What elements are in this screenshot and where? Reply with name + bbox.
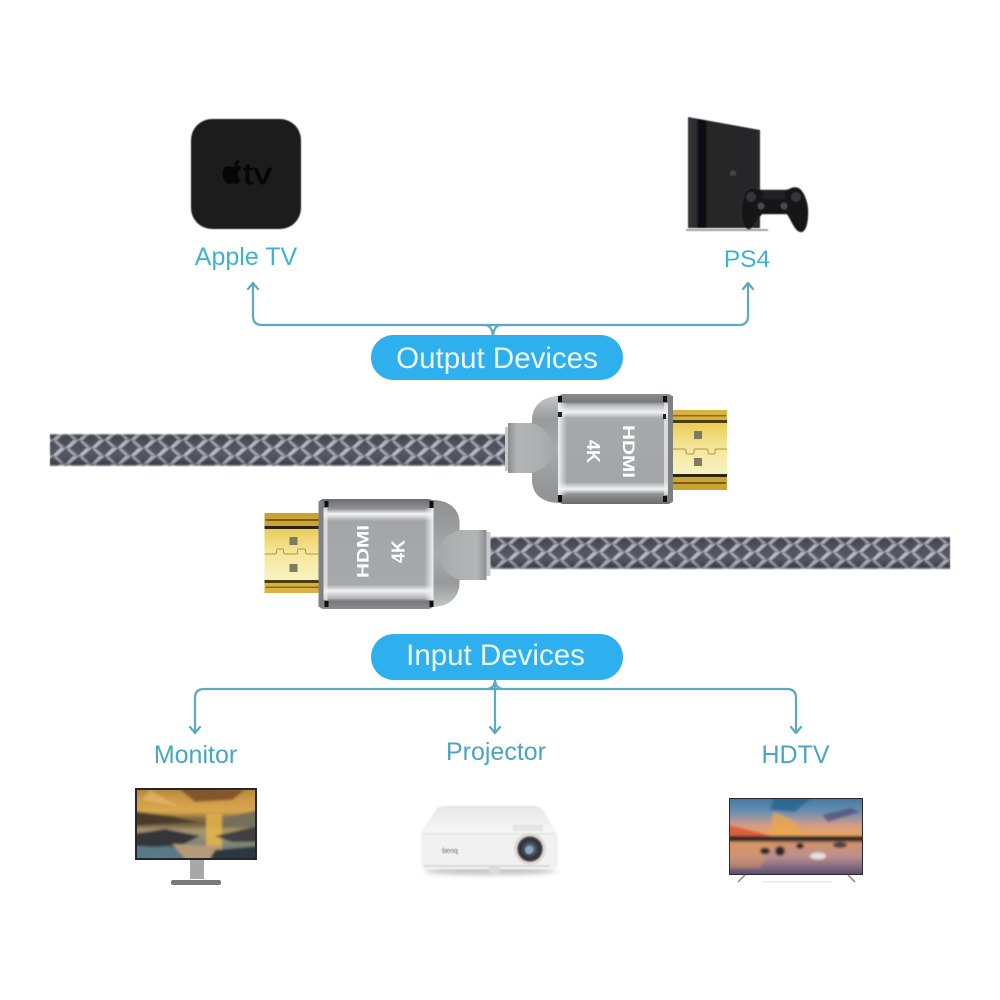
metal shell bbox=[318, 499, 434, 609]
metal shell bbox=[558, 394, 673, 504]
gold plug bbox=[672, 410, 727, 490]
brand text: benq bbox=[442, 848, 458, 855]
strain relief bbox=[432, 500, 490, 607]
pill: Input Devices bbox=[371, 634, 623, 680]
icon: Apple TV box bbox=[191, 119, 301, 229]
text: HDMI: HDMI bbox=[354, 525, 372, 578]
lens bbox=[514, 833, 546, 865]
TV feet bbox=[738, 875, 855, 882]
pill: Output Devices: Output Devices bbox=[396, 342, 598, 375]
arrow: input devices connector bbox=[190, 680, 801, 733]
cable: lower braided cable bbox=[488, 537, 950, 569]
console bbox=[686, 117, 768, 231]
label: PS4: PS4 bbox=[724, 246, 770, 273]
label: HDTV: HDTV bbox=[761, 741, 830, 769]
label: Apple TV: Apple TV bbox=[195, 243, 298, 271]
gold plug bbox=[264, 513, 320, 593]
icon: projector bbox=[421, 806, 558, 875]
text: 4K: 4K bbox=[583, 440, 603, 463]
Apple TV logo: tv bbox=[243, 156, 273, 191]
icon: monitor bbox=[130, 785, 260, 885]
cable: upper braided cable bbox=[50, 434, 506, 466]
strain relief bbox=[505, 396, 560, 503]
text: HDMI: HDMI bbox=[619, 425, 638, 478]
arrow: output devices connector bbox=[248, 283, 753, 336]
connector: upper HDMI plug bbox=[505, 394, 727, 504]
label: Monitor: Monitor bbox=[154, 741, 237, 769]
icon: HDTV bbox=[722, 792, 870, 882]
text: 4K: 4K bbox=[388, 540, 408, 563]
pill: Input Devices: Input Devices bbox=[406, 639, 585, 672]
label: Projector: Projector bbox=[446, 738, 546, 766]
icon: PS4 console with controller bbox=[686, 117, 808, 232]
controller bbox=[741, 187, 808, 232]
monitor screen bbox=[137, 790, 255, 858]
connector: lower HDMI plug bbox=[264, 499, 490, 609]
TV screen bbox=[730, 799, 862, 874]
pill: Output Devices bbox=[371, 335, 623, 380]
